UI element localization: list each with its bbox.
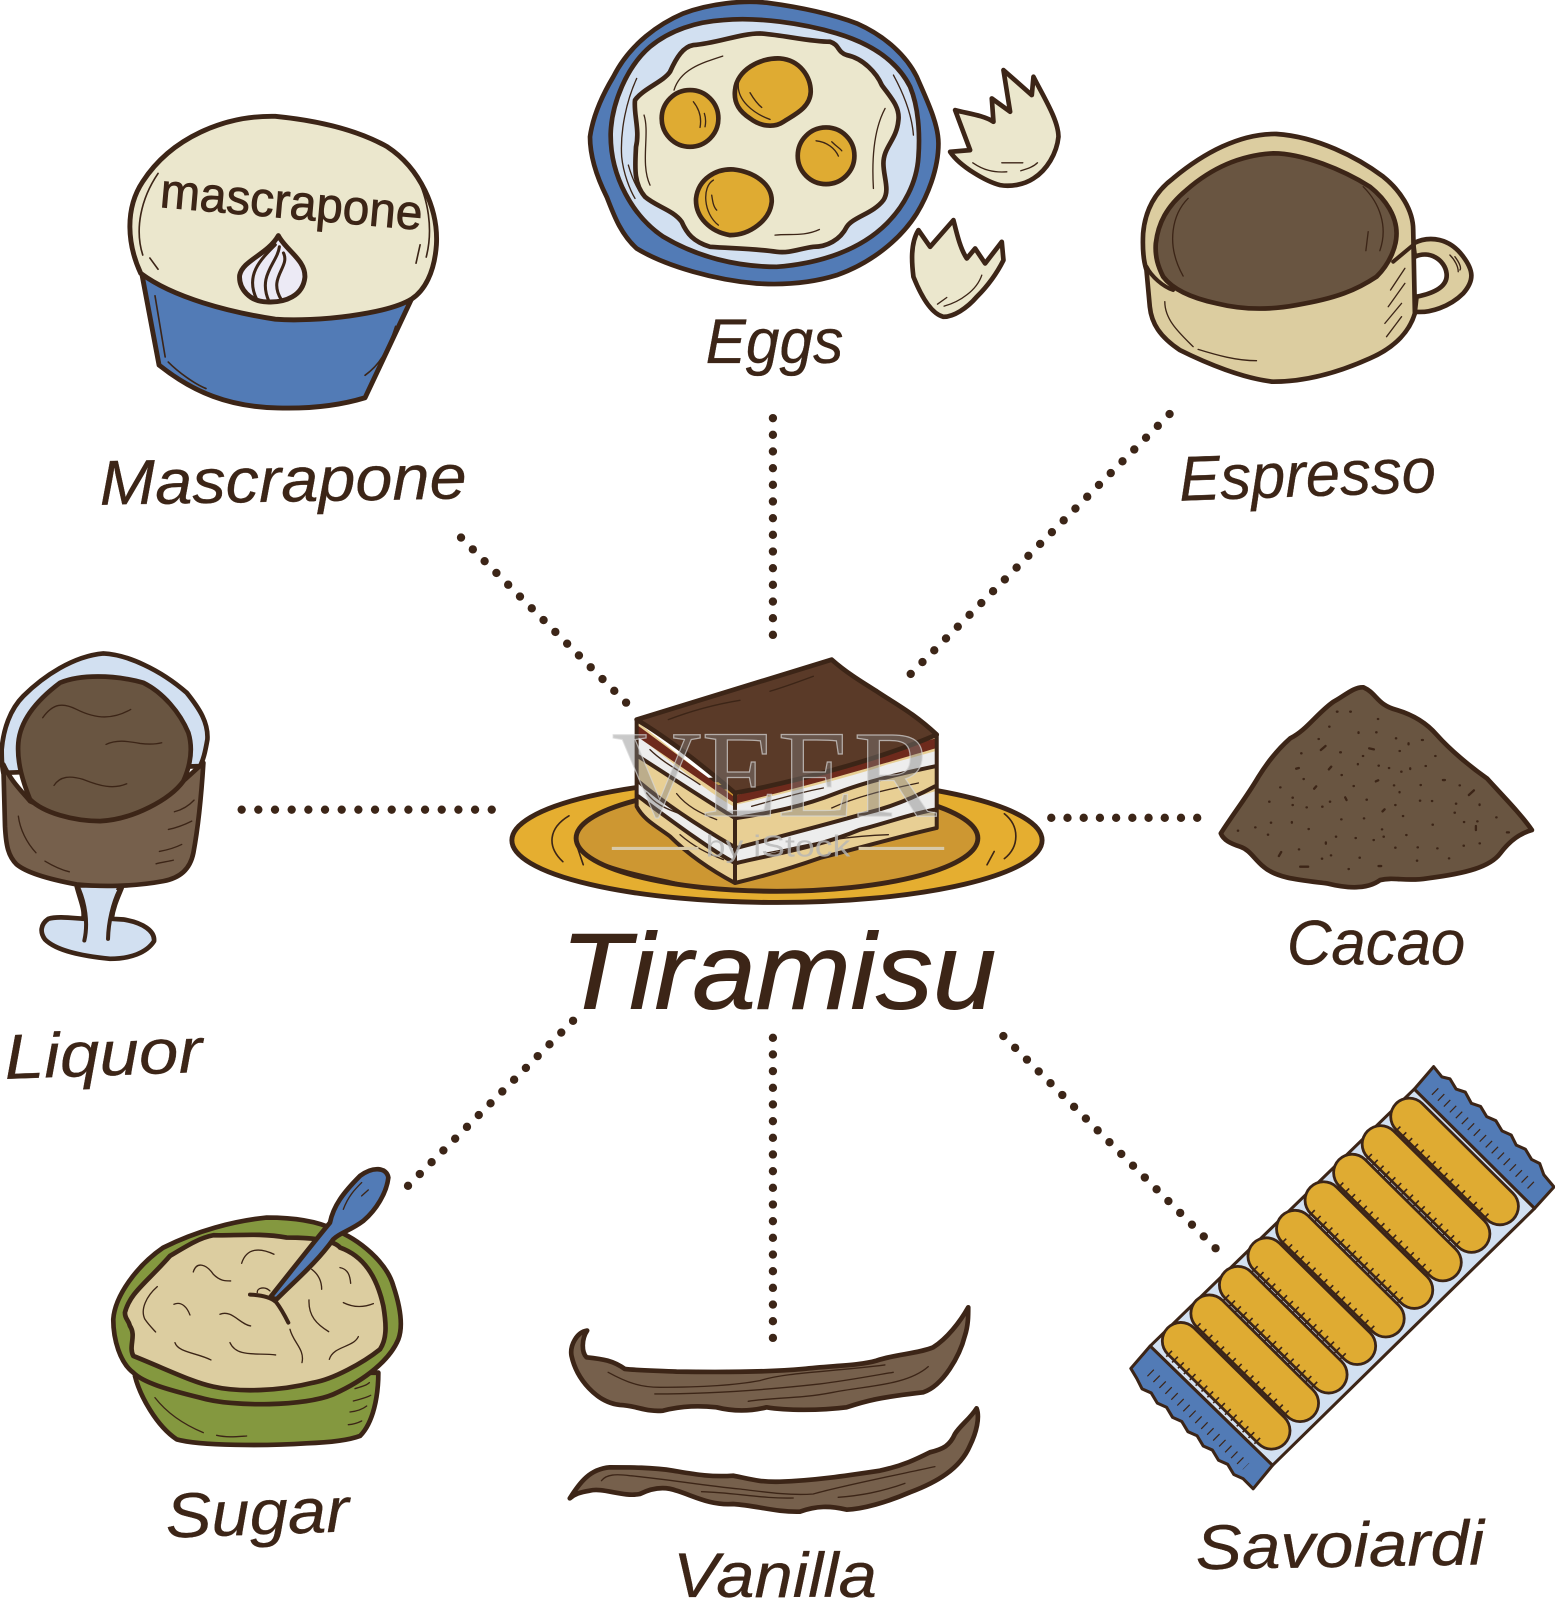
icon: eggshell lower xyxy=(912,220,1003,317)
label: Espresso: Espresso xyxy=(1178,436,1437,515)
icon: cacao powder pile xyxy=(1221,687,1532,887)
text: mascrapone lid label: mascrapone xyxy=(158,164,425,241)
glass stem and foot xyxy=(42,886,154,959)
label: Eggs: Eggs xyxy=(706,307,843,377)
watermark: VEER xyxy=(612,705,937,843)
icon: liquor glass xyxy=(2,653,207,959)
label: Mascrapone: Mascrapone xyxy=(99,442,467,519)
icon: tiramisu slice xyxy=(637,660,937,883)
central illustration: tiramisu on plate xyxy=(512,660,1042,902)
icon: espresso cup xyxy=(1143,134,1471,382)
icon: cream swirl xyxy=(240,236,305,302)
savoiardi biscuits xyxy=(1169,1117,1500,1443)
icon: eggshell upper xyxy=(950,70,1058,186)
icon: spoon xyxy=(250,1169,388,1323)
icon: savoiardi package xyxy=(1131,1067,1554,1489)
icon: plate xyxy=(512,778,1042,902)
icon: eggs on plate xyxy=(590,2,1058,317)
label: Liquor: Liquor xyxy=(3,1016,207,1093)
label: Cacao: Cacao xyxy=(1287,909,1465,979)
title: Tiramisu xyxy=(561,911,996,1032)
icon: mascarpone tub xyxy=(130,116,437,408)
dotted connectors xyxy=(242,414,1223,1338)
icon: sugar bowl xyxy=(113,1169,401,1445)
label: Savoiardi: Savoiardi xyxy=(1195,1508,1487,1583)
icon: vanilla pods xyxy=(570,1307,978,1512)
label: Sugar: Sugar xyxy=(164,1475,353,1552)
watermark: by iStock xyxy=(706,830,851,864)
